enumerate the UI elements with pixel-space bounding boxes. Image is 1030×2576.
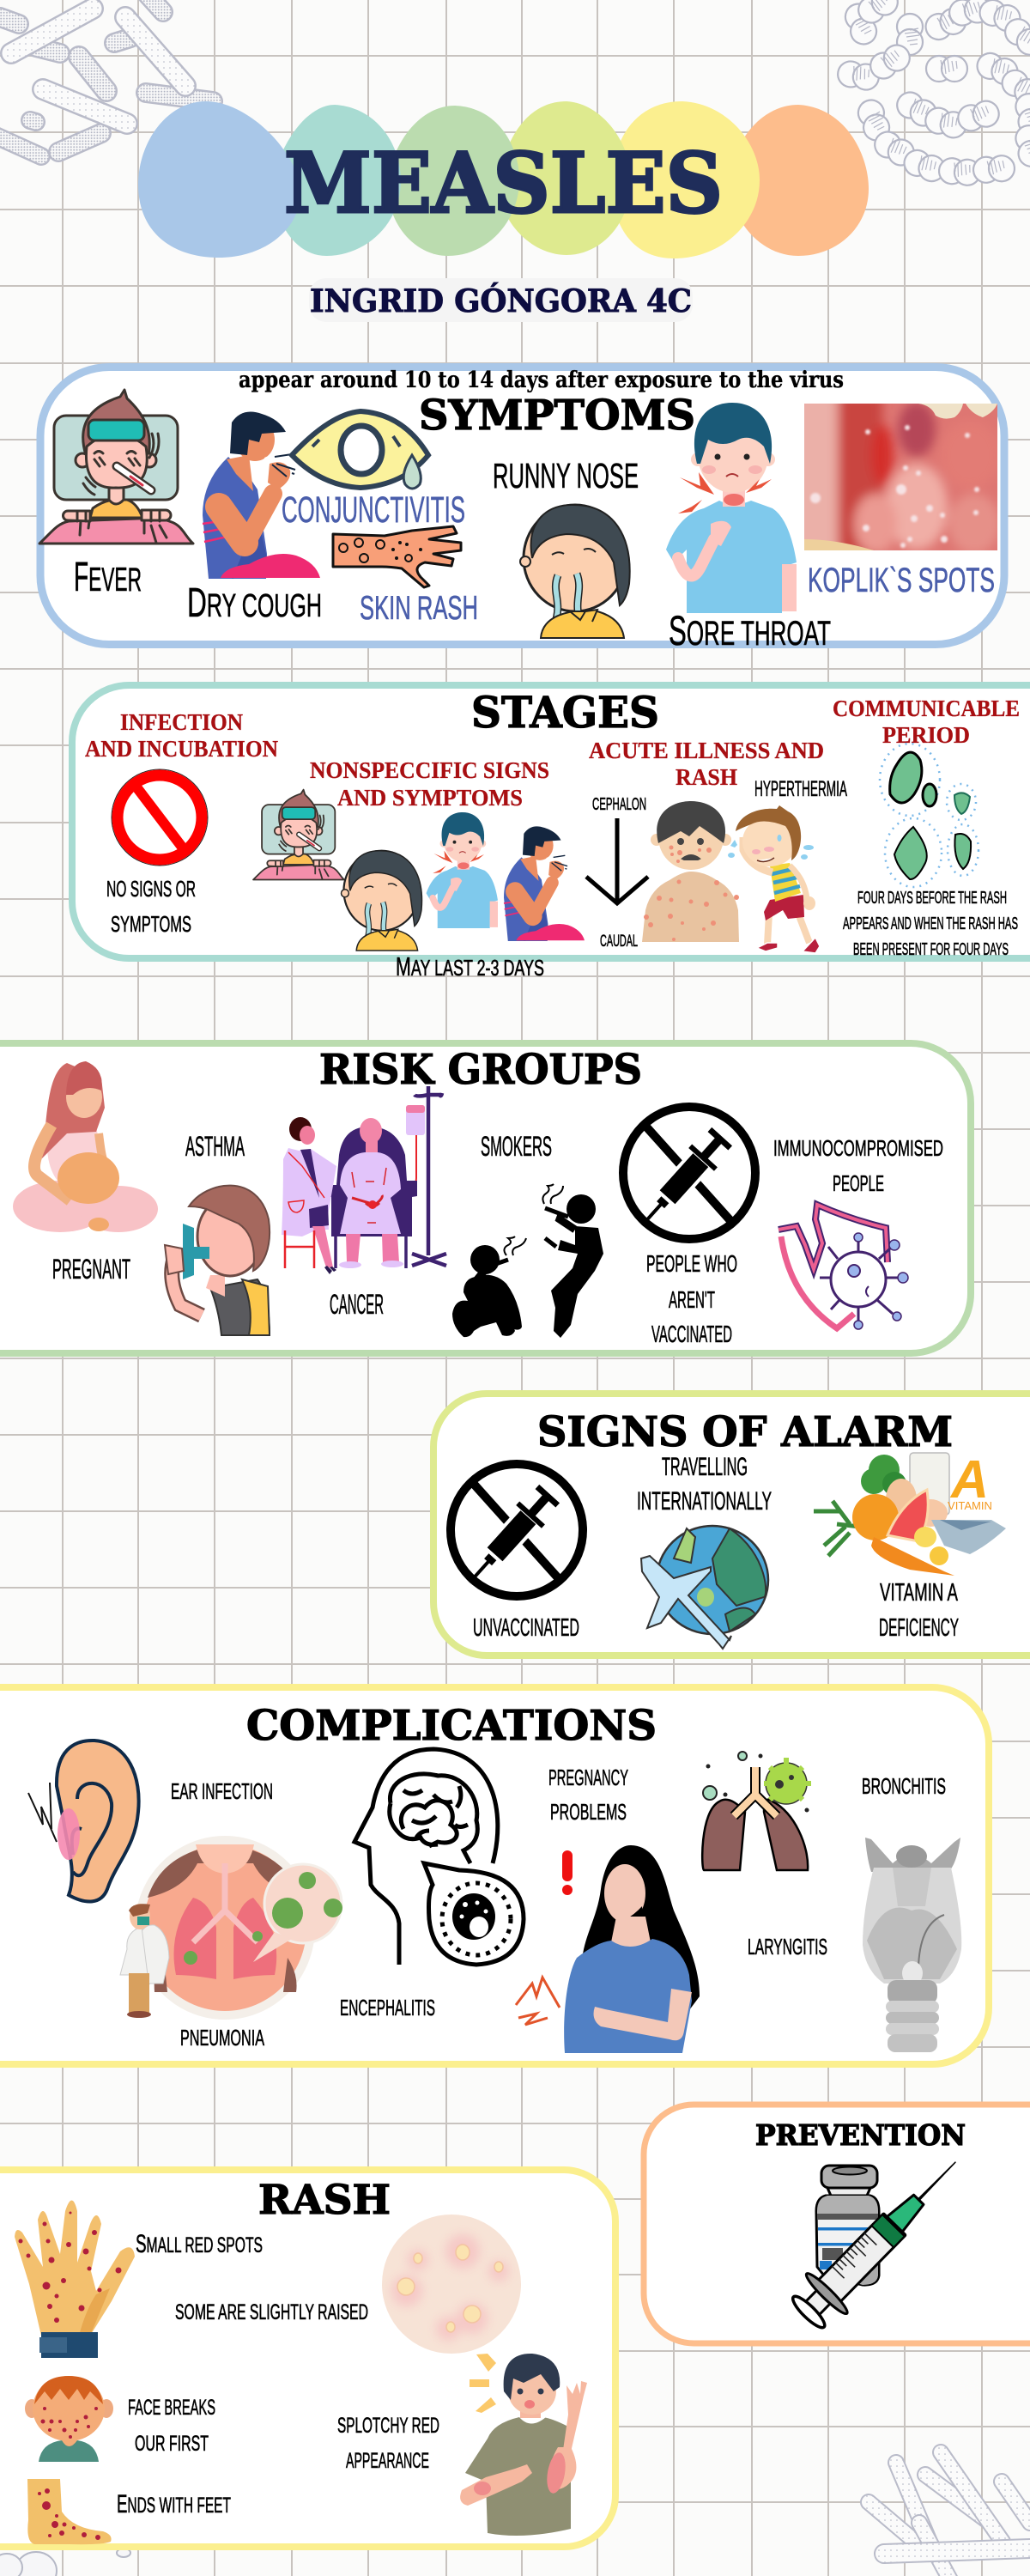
icon: pimples on skin — [382, 2215, 521, 2354]
label: conjunctivitis: CONJUNCTIVITIS — [282, 489, 465, 531]
icon: ear — [28, 1741, 139, 1902]
icon: vitamin A foods: A — [949, 1450, 989, 1510]
heading: symptoms: SYMPTOMS — [419, 392, 695, 440]
label: immunocompromised people — [773, 1135, 943, 1196]
icon: globe and plane — [641, 1526, 768, 1649]
stage 3 heading: RASH — [676, 764, 737, 790]
label: caudal: CAUDAL — [600, 933, 638, 951]
title blobs — [138, 101, 869, 258]
label: slightly raised: SOME ARE SLIGHTLY RAISED — [175, 2300, 368, 2324]
icon: measles viruses — [880, 744, 978, 887]
title: MEASLES — [284, 135, 723, 232]
icon: lungs with virus — [702, 1752, 811, 1870]
icon: vitamin A foods: VITAMIN — [948, 1499, 992, 1512]
label: smokers: SMOKERS — [481, 1131, 552, 1162]
photo: koplik spots — [804, 404, 997, 550]
label: pregnancy problems — [548, 1765, 628, 1825]
panel: signs of alarm — [433, 1394, 1030, 1656]
label: pneumonia: PNEUMONIA — [180, 2025, 264, 2050]
label: travelling internationally — [637, 1453, 772, 1516]
panel: stages — [72, 685, 1030, 959]
icon: child face with spots — [25, 2376, 113, 2462]
icon: smokers — [452, 1184, 603, 1338]
icon: man with rash — [460, 2354, 587, 2536]
stage 1 note: SYMPTOMS — [111, 911, 191, 937]
icon: larynx — [863, 1838, 961, 2052]
stage 1 note — [106, 876, 196, 937]
stage 4 note — [843, 889, 1018, 959]
label: asthma: ASTHMA — [185, 1131, 245, 1162]
label: face breaks out first: OUR FIRST — [135, 2432, 209, 2456]
icon: vaccine vial and syringe — [785, 2142, 976, 2336]
stage 1 note: NO SIGNS OR — [106, 876, 196, 902]
stage 2 heading: NONSPECCIFIC SIGNS — [310, 757, 549, 783]
heading: prevention: PREVENTION — [755, 2118, 966, 2152]
panel: symptoms — [39, 368, 1004, 654]
icon: cancer patient with doctor — [282, 1086, 446, 1274]
icon: runny nose — [520, 505, 630, 638]
stage 3 heading — [589, 738, 824, 790]
label: immunocompromised people: IMMUNOCOMPROMISED — [773, 1135, 943, 1161]
stage 3 heading: ACUTE ILLNESS AND — [589, 738, 824, 763]
icon: runny nose small — [342, 851, 421, 951]
label: unvaccinated people: VACCINATED — [651, 1321, 732, 1347]
stage 4 heading: COMMUNICABLE — [833, 696, 1020, 721]
author: INGRID GÓNGORA 4C — [310, 283, 692, 319]
label: unvaccinated people — [646, 1250, 737, 1347]
label: pregnancy problems: PREGNANCY — [548, 1765, 628, 1790]
duration note: MAY LAST 2-3 DAYS — [396, 951, 544, 981]
label: hyperthermia: HYPERTHERMIA — [754, 777, 847, 801]
label: travelling internationally: INTERNATIONALLY — [637, 1487, 772, 1516]
icon: fever small — [253, 790, 344, 879]
icon: feverish child — [728, 805, 820, 953]
arrow: cephalon to caudal — [586, 818, 648, 903]
heading: stages: STAGES — [471, 687, 659, 738]
stage 4 heading — [833, 696, 1020, 748]
icon: pregnant woman — [13, 1061, 158, 1232]
stage 1 heading: AND INCUBATION — [85, 736, 278, 762]
label: travelling internationally: TRAVELLING — [662, 1453, 748, 1481]
icon: hand with spots — [15, 2200, 135, 2358]
label: ends with feet: ENDS WITH FEET — [117, 2490, 231, 2518]
panel: complications — [0, 1687, 989, 2064]
label: splotchy red appearance: APPEARANCE — [346, 2449, 429, 2473]
stage 2 heading: AND SYMPTOMS — [337, 785, 523, 811]
heading: signs of alarm: SIGNS OF ALARM — [537, 1408, 953, 1456]
decoration: cocci bottom left — [0, 2549, 130, 2576]
heading: complications: COMPLICATIONS — [246, 1702, 657, 1750]
decoration: cocci chains top right — [836, 0, 1030, 186]
icon: prohibition sign — [112, 769, 208, 866]
icon: sore throat — [666, 403, 797, 613]
icon: pneumonia lungs — [120, 1836, 342, 2020]
label: splotchy red appearance: SPLOTCHY RED — [337, 2414, 439, 2438]
label: encephalitis: ENCEPHALITIS — [340, 1995, 435, 2020]
label: bronchitis: BRONCHITIS — [862, 1773, 946, 1799]
icon: broken shield and virus — [779, 1205, 908, 1329]
label: unvaccinated people: PEOPLE WHO — [646, 1250, 737, 1277]
label: dry cough: DRY COUGH — [187, 580, 322, 626]
icon: pregnant woman in pain — [516, 1845, 700, 2053]
label: face breaks out first — [128, 2396, 215, 2456]
decoration: bacilli bottom right — [869, 2452, 1030, 2576]
heading: risk groups: RISK GROUPS — [319, 1046, 642, 1094]
label: ear infection: EAR INFECTION — [171, 1778, 273, 1804]
icon: child with rash — [642, 801, 739, 942]
panel: risk groups: CANCER — [330, 1289, 384, 1320]
label: fever: FEVER — [74, 555, 142, 600]
panel: prevention — [644, 2105, 1030, 2343]
label: unvaccinated people: AREN'T — [669, 1286, 715, 1313]
stage 2 heading — [310, 757, 549, 811]
label: sore throat: SORE THROAT — [669, 609, 831, 654]
label: pregnancy problems: PROBLEMS — [550, 1799, 627, 1825]
label: laryngitis: LARYNGITIS — [748, 1934, 827, 1959]
label: vitamin A deficiency: DEFICIENCY — [879, 1614, 959, 1642]
symptoms intro text: appear around 10 to 14 days after exposure to the virus — [239, 368, 844, 393]
label: cephalon: CEPHALON — [592, 795, 646, 814]
icon: foot with spots — [27, 2479, 112, 2544]
label: runny nose: RUNNY NOSE — [493, 456, 639, 495]
icon: conjunctivitis eye — [292, 411, 428, 489]
icon: cough small — [504, 826, 585, 941]
panel: risk groups — [0, 1043, 971, 1353]
label: skin rash: SKIN RASH — [360, 590, 478, 627]
label: immunocompromised people: PEOPLE — [833, 1170, 884, 1196]
icon: no vaccine — [623, 1107, 755, 1239]
icon: no vaccine — [451, 1464, 583, 1596]
icon: brain in head with cell bubble — [354, 1749, 524, 1965]
label: small red spots: SMALL RED SPOTS — [136, 2230, 263, 2258]
icon: vitamin A foods — [814, 1450, 1006, 1576]
stage 4 heading: PERIOD — [882, 722, 970, 748]
label: vitamin A deficiency: VITAMIN A — [880, 1579, 958, 1607]
icon: boy with inhaler — [165, 1186, 270, 1335]
icon: sore throat small — [427, 812, 498, 928]
label: splotchy red appearance — [337, 2414, 439, 2473]
icon: dry cough — [203, 412, 320, 579]
label: vitamin A deficiency — [879, 1579, 959, 1642]
icon: fever — [39, 390, 193, 544]
panel: rash — [0, 2170, 615, 2547]
label: unvaccinated: UNVACCINATED — [473, 1614, 579, 1642]
label: pregnant: PREGNANT — [52, 1254, 130, 1285]
heading: rash: RASH — [258, 2177, 391, 2224]
stage 1 heading — [85, 709, 278, 762]
icon: skin rash arm — [333, 526, 461, 587]
decoration: bacilli top left — [0, 0, 213, 156]
label: face breaks out first: FACE BREAKS — [128, 2396, 215, 2420]
stage 1 heading: INFECTION — [120, 709, 243, 735]
